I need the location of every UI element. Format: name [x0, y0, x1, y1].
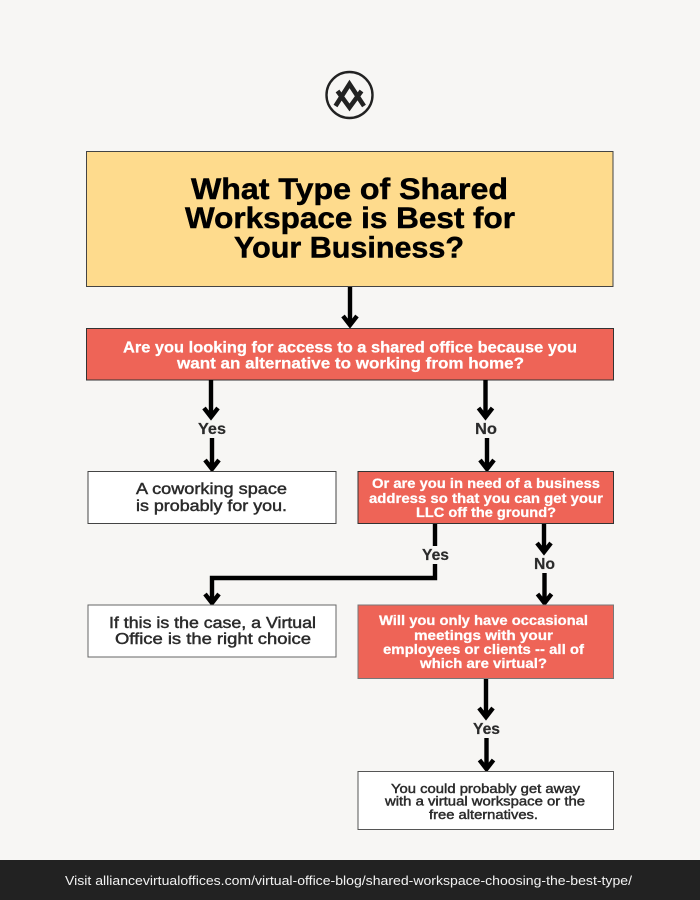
result: coworking space [88, 472, 336, 524]
panel: question 1: Are you looking for access to a shared office because you [123, 340, 577, 356]
result: virtual office [88, 605, 336, 657]
arrow: question 1 to Yes [204, 380, 218, 417]
panel: question 3: employees or clients -- all of [383, 642, 585, 657]
arrow: question 3 to Yes [479, 679, 493, 717]
panel: question 3: Will you only have occasional [379, 613, 588, 628]
panel: question 3: which are virtual? [419, 656, 547, 671]
panel: question 2 [358, 472, 614, 524]
panel: question 3 [358, 605, 614, 678]
title panel: What Type of Shared [191, 173, 508, 206]
label: No (question 1): No [475, 421, 497, 438]
icon: company logo [326, 72, 372, 118]
connector: question 2 to Yes [433, 524, 437, 546]
title panel [86, 152, 613, 286]
arrow: Yes to virtual office result [205, 564, 435, 603]
footer bar with source link [0, 860, 700, 900]
arrow: title to first question [343, 287, 357, 325]
result: virtual office: Office is the right choice [115, 631, 311, 648]
title panel: Your Business? [234, 232, 464, 264]
arrow: question 2 to No [537, 524, 551, 552]
arrow: No to question 3 [538, 573, 552, 603]
result: virtual workspace or free alternatives [358, 772, 614, 830]
label: Yes (question 1): Yes [198, 421, 226, 438]
label: No (question 2): No [534, 556, 555, 573]
panel: question 2: LLC off the ground? [416, 505, 556, 520]
label: Yes (question 3): Yes [473, 721, 500, 738]
result: coworking space: is probably for you. [136, 498, 287, 515]
panel: question 2: address so that you can get your [369, 491, 604, 506]
arrow: question 1 to No [478, 380, 492, 417]
result: virtual workspace or free alternatives: You could probably get away [391, 781, 581, 796]
panel: question 1 [86, 328, 614, 380]
result: virtual workspace or free alternatives: with a virtual workspace or the [384, 794, 585, 808]
result: virtual workspace or free alternatives: free alternatives. [429, 807, 538, 822]
panel: question 3: meetings with your [414, 628, 554, 643]
arrow: No to question 2 [480, 438, 494, 469]
arrow: Yes to coworking result [205, 438, 219, 469]
panel: question 2: Or are you in need of a business [372, 476, 600, 491]
footer bar with source link: Visit alliancevirtualoffices.com/virtual-office-blog/shared-workspace-choosing-the-best-type/ [65, 874, 633, 888]
arrow: Yes to virtual workspace result [480, 738, 494, 769]
result: virtual office: If this is the case, a Virtual [109, 615, 316, 632]
title panel: Workspace is Best for [185, 202, 515, 235]
result: coworking space: A coworking space [136, 481, 287, 498]
panel: question 1: want an alternative to working from home? [176, 356, 524, 372]
label: Yes (question 2): Yes [422, 547, 449, 564]
